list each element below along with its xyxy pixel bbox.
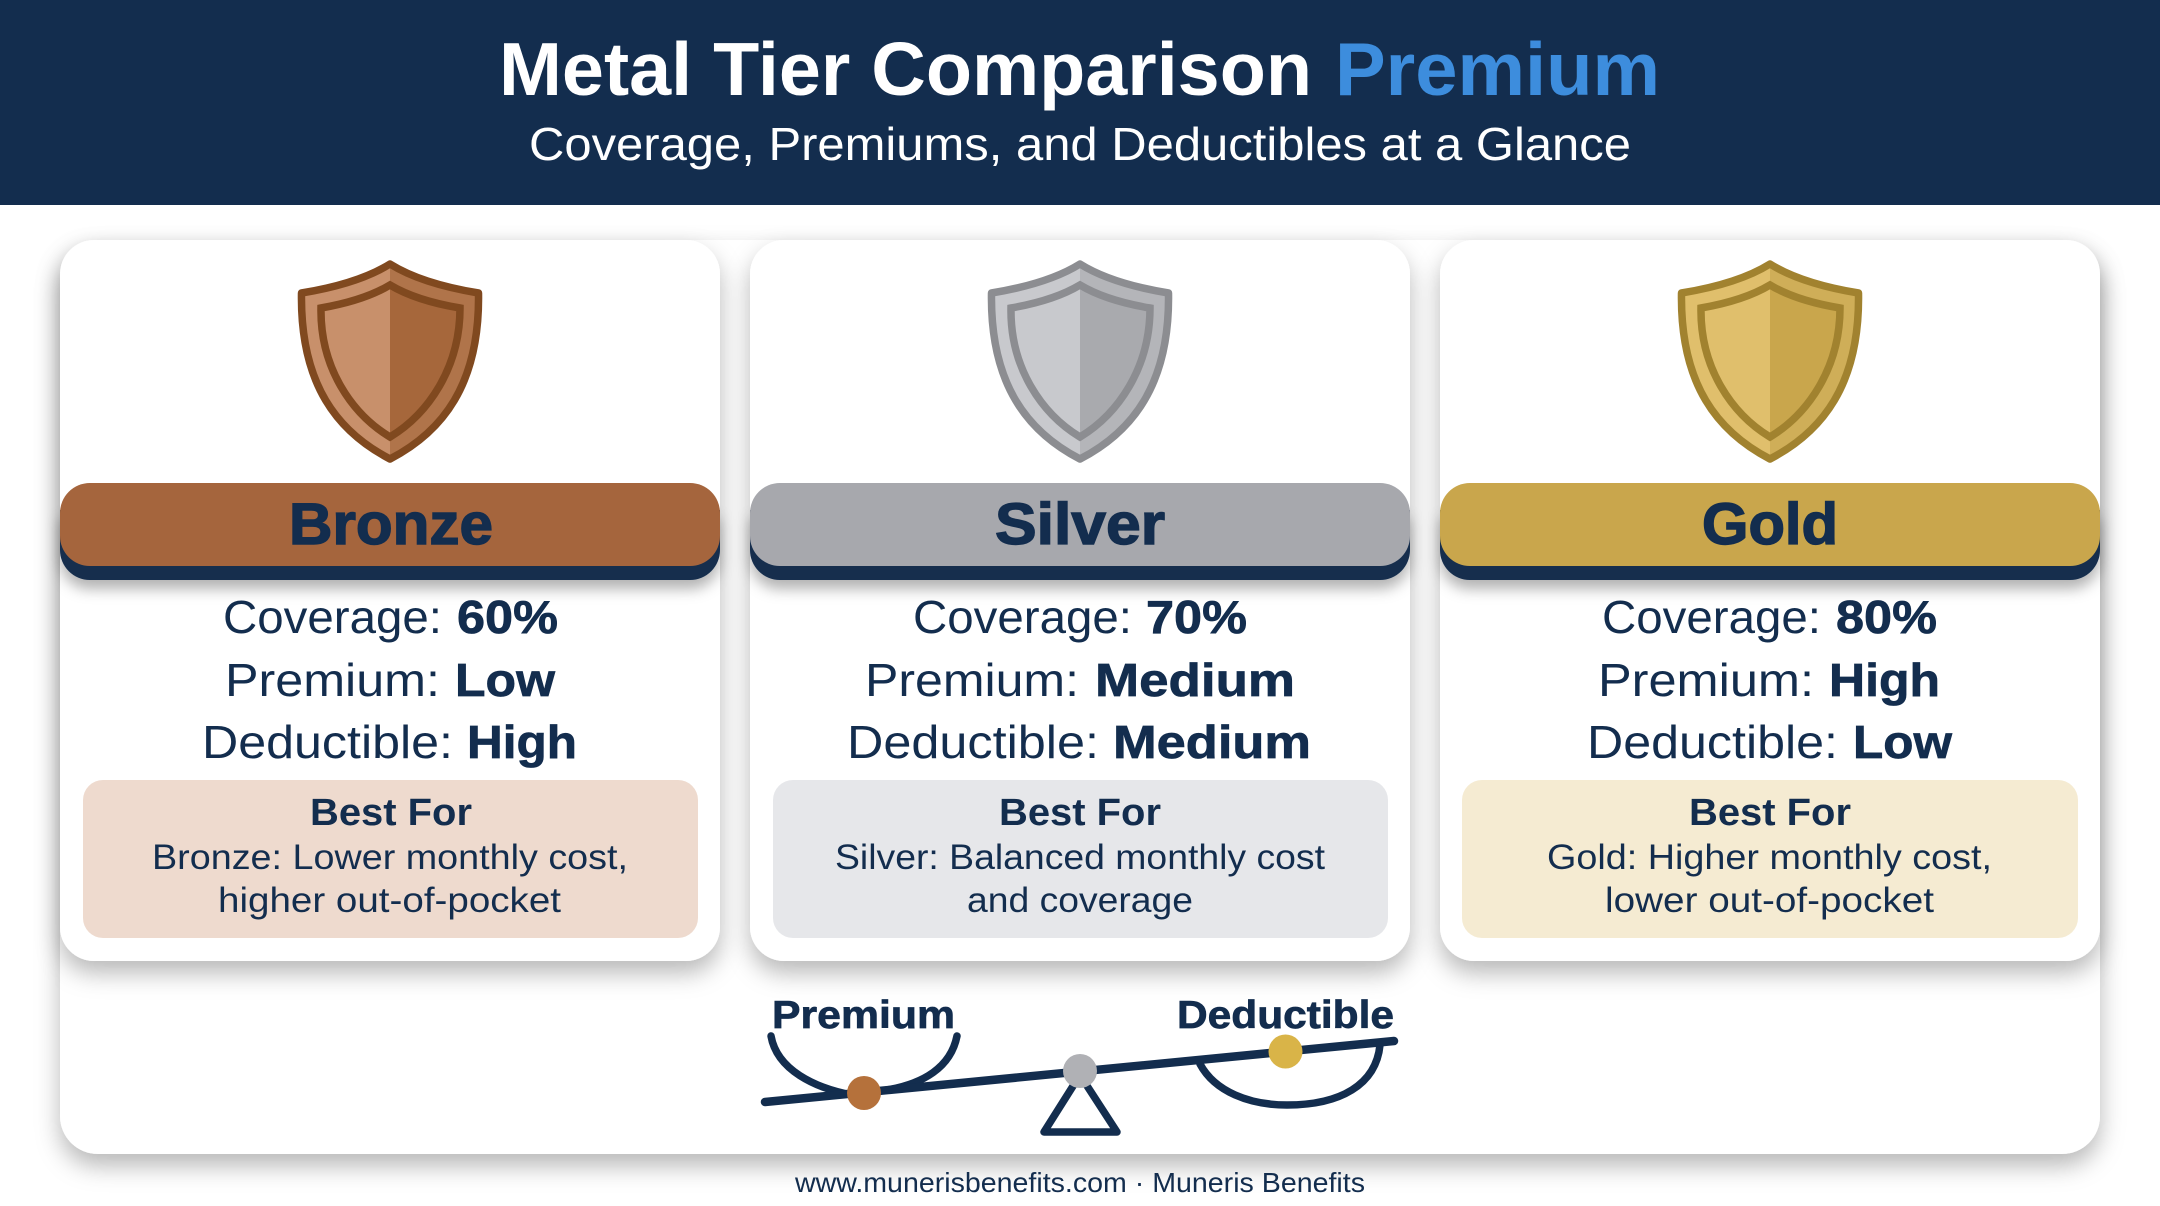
title: Premium bbox=[1335, 27, 1660, 111]
silver stats bbox=[847, 591, 1311, 768]
gold stats: 80% bbox=[1836, 591, 1937, 643]
silver stats: Deductible: bbox=[847, 716, 1099, 768]
bronze stats: Low bbox=[455, 654, 555, 706]
balance scale graphic bbox=[765, 994, 1394, 1132]
bronze best for: Bronze: Lower monthly cost, bbox=[152, 838, 628, 877]
header banner bbox=[0, 0, 2160, 205]
gold stats: Low bbox=[1853, 716, 1952, 768]
bronze stats: Deductible: bbox=[202, 716, 453, 768]
gold best for: Best For bbox=[1689, 792, 1851, 834]
gold stats: High bbox=[1829, 654, 1940, 706]
outer panel bbox=[60, 240, 2100, 1154]
bronze best for: higher out-of-pocket bbox=[218, 881, 561, 920]
panel: bronze bbox=[60, 240, 720, 961]
icon: bronze shield bbox=[301, 264, 479, 459]
bronze name band bbox=[60, 483, 720, 580]
gold stats: Coverage: bbox=[1602, 591, 1821, 643]
gold best for: lower out-of-pocket bbox=[1605, 881, 1934, 920]
gold name band bbox=[1440, 483, 2100, 580]
gold name band: Gold bbox=[1702, 492, 1838, 557]
scale frame bbox=[765, 1036, 1394, 1132]
silver stats: 70% bbox=[1146, 591, 1247, 643]
silver best for: and coverage bbox=[967, 881, 1193, 920]
panel: gold bbox=[1440, 240, 2100, 961]
bronze best for: Best For bbox=[310, 792, 472, 834]
bronze name band: Bronze bbox=[289, 492, 493, 557]
bronze stats: Premium: bbox=[225, 654, 440, 706]
silver stats: Medium bbox=[1095, 654, 1295, 706]
icon: silver shield bbox=[991, 264, 1169, 459]
silver name band: Silver bbox=[995, 492, 1165, 557]
subtitle: Coverage, Premiums, and Deductibles at a Glance bbox=[529, 118, 1631, 170]
silver best for bbox=[773, 780, 1388, 938]
silver stats: Medium bbox=[1113, 716, 1311, 768]
panel: silver bbox=[750, 240, 1410, 961]
bronze stats bbox=[202, 591, 577, 768]
bronze stats: 60% bbox=[457, 591, 558, 643]
bronze stats: High bbox=[467, 716, 577, 768]
icon: gold shield bbox=[1681, 264, 1859, 459]
title: Metal Tier Comparison bbox=[499, 27, 1312, 111]
silver best for: Silver: Balanced monthly cost bbox=[835, 838, 1325, 877]
label: premium: Premium bbox=[772, 994, 955, 1037]
footer: www.munerisbenefits.com · Muneris Benefits bbox=[794, 1167, 1365, 1198]
gold stats: Deductible: bbox=[1587, 716, 1838, 768]
gold stats bbox=[1587, 591, 1952, 768]
silver stats: Coverage: bbox=[913, 591, 1132, 643]
silver stats: Premium: bbox=[865, 654, 1079, 706]
silver best for: Best For bbox=[999, 792, 1161, 834]
bronze stats: Coverage: bbox=[223, 591, 442, 643]
title bbox=[499, 27, 1660, 111]
gold stats: Premium: bbox=[1598, 654, 1814, 706]
pivot and weights bbox=[847, 1034, 1302, 1110]
label: deductible: Deductible bbox=[1177, 994, 1394, 1037]
gold best for bbox=[1462, 780, 2078, 938]
gold best for: Gold: Higher monthly cost, bbox=[1547, 838, 1992, 877]
bronze best for bbox=[83, 780, 698, 938]
silver name band bbox=[750, 483, 1410, 580]
